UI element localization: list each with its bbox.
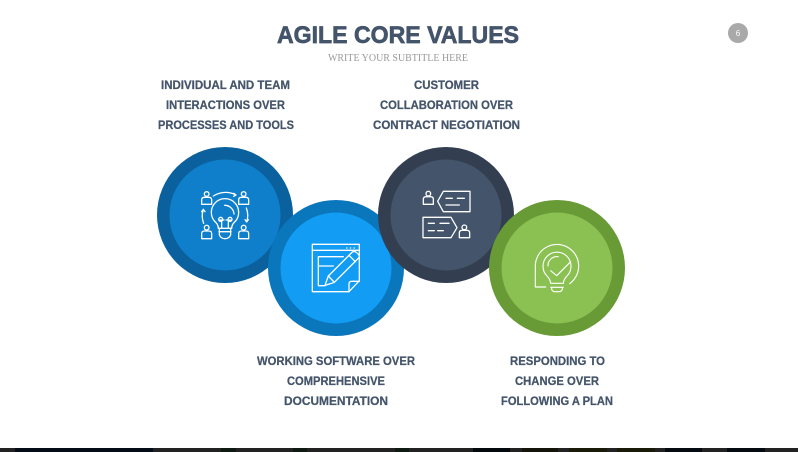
circle: customer collaboration <box>378 147 514 283</box>
icon: document and pencil <box>312 244 359 292</box>
text block: working software: COMPREHENSIVE <box>287 374 385 388</box>
text block: customer collaboration <box>373 78 520 132</box>
text block: working software <box>257 354 415 408</box>
text block: individual and team interactions <box>158 78 294 132</box>
page number badge: 6 <box>736 29 741 38</box>
text block: responding to change <box>501 354 613 408</box>
text block: customer collaboration: COLLABORATION OVER <box>380 98 513 112</box>
text block: customer collaboration: CONTRACT NEGOTIATION <box>373 118 520 132</box>
text block: customer collaboration: CUSTOMER <box>414 78 479 92</box>
icon: people around light bulb <box>202 192 249 239</box>
icon: people exchanging tags <box>423 191 470 238</box>
circle: individuals and interactions <box>157 147 293 283</box>
text block: individual and team interactions: PROCESSES AND TOOLS <box>158 118 294 132</box>
text block: responding to change: FOLLOWING A PLAN <box>501 394 613 408</box>
subtitle: WRITE YOUR SUBTITLE HERE <box>328 52 468 64</box>
bottom bar <box>0 448 798 452</box>
circle: responding to change <box>489 200 625 336</box>
title: AGILE CORE VALUES <box>277 22 519 49</box>
text block: working software: DOCUMENTATION <box>284 394 388 408</box>
text block: responding to change: CHANGE OVER <box>515 374 599 388</box>
circle: working software <box>268 200 404 336</box>
page number badge <box>728 23 748 43</box>
text block: individual and team interactions: INTERACTIONS OVER <box>166 98 285 112</box>
text block: individual and team interactions: INDIVIDUAL AND TEAM <box>161 78 290 92</box>
text block: working software: WORKING SOFTWARE OVER <box>257 354 415 368</box>
text block: responding to change: RESPONDING TO <box>510 354 605 368</box>
icon: light bulb with check <box>535 244 579 292</box>
